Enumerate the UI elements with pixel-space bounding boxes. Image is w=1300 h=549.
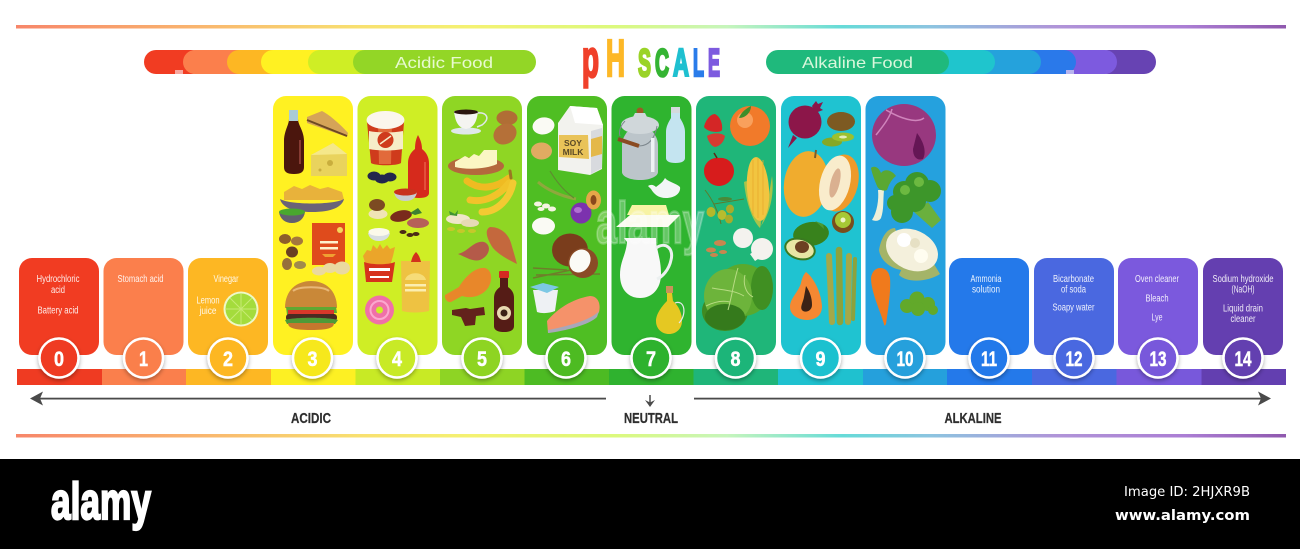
- icon: cauliflower: [879, 221, 945, 281]
- icon: milk can: [618, 108, 659, 180]
- card 11 text: Ammonia: [970, 274, 1002, 285]
- icon: butter on plate: [448, 150, 504, 175]
- card 12 text: of soda: [1061, 284, 1086, 296]
- icon: avocado half: [782, 234, 818, 264]
- title: pH SCALE: L: [693, 42, 704, 85]
- badge 8: 8: [730, 348, 741, 371]
- icon: cheese: [311, 143, 347, 176]
- card 14 text: Sodium hydroxide: [1212, 274, 1274, 285]
- icon: beetroot: [788, 101, 823, 148]
- foods: pH 10: [871, 104, 945, 326]
- footer url: www.alamy.com: [1115, 508, 1250, 524]
- card 13 text: Bleach: [1146, 294, 1168, 304]
- icon: guacamole bowl: [279, 208, 305, 223]
- foods: pH 3: [279, 110, 350, 330]
- card 13 text: Lye: [1152, 312, 1163, 324]
- card 11 text: solution: [972, 284, 1000, 296]
- top rainbow line: [16, 25, 1286, 28]
- icon: nuts: [279, 234, 306, 270]
- badge 6: 6: [561, 348, 571, 371]
- icon: soy milk carton: SOY: [564, 138, 582, 148]
- card 14 text: (NaOH): [1232, 284, 1254, 296]
- icon: donut: [365, 296, 394, 324]
- icon: green cabbage: [702, 264, 773, 331]
- header pill: alkaline food: [766, 50, 1156, 74]
- card 0 text: acid: [51, 285, 65, 296]
- footer band: [0, 459, 1300, 549]
- icon: lime slice: [224, 292, 258, 326]
- foods: pH 6: [530, 106, 603, 333]
- badge 2: 2: [223, 348, 233, 371]
- icon: red apple: [704, 153, 734, 186]
- badge 4: [378, 338, 416, 378]
- icon: potatoes: [490, 110, 520, 149]
- icon: coconut: [533, 234, 600, 278]
- badge 13: [1138, 338, 1178, 378]
- watermark: alamy: alamy: [596, 191, 704, 256]
- icon: white egg: [532, 218, 555, 234]
- icon: ketchup dip: [394, 188, 417, 201]
- pH colour cards: [19, 96, 1283, 355]
- text: E: [708, 42, 720, 85]
- icon: orange: [730, 106, 770, 146]
- icon: nachos bowl: [280, 185, 344, 212]
- icon: chips: [312, 262, 350, 276]
- icon: leek: [871, 167, 896, 221]
- icon: papaya: [790, 272, 822, 320]
- icon: prunes: [368, 172, 396, 184]
- icon: snack bag: [312, 223, 345, 265]
- icon: sweet potatoes: [458, 227, 517, 264]
- icon: milk pitcher: [620, 238, 672, 298]
- icon: coffee cup: [451, 110, 487, 134]
- footer image id: Image ID: 2HJXR9B: [1124, 484, 1250, 500]
- badge 1: [124, 338, 163, 378]
- icon: cola bottle: [284, 110, 304, 174]
- card 2 text: Lemon: [196, 296, 220, 306]
- badge 14: 14: [1234, 348, 1252, 371]
- icon: bananas: [467, 171, 513, 212]
- card 0 text: [36, 274, 80, 316]
- label: acidic: ACIDIC: [291, 411, 331, 427]
- icon: asparagus: [829, 250, 855, 322]
- pH strip: [17, 369, 1286, 385]
- badge 0: [40, 338, 78, 378]
- foods: pH 4: [363, 111, 430, 324]
- badge 9: 9: [816, 348, 826, 371]
- icon: avocado whole: [792, 220, 830, 248]
- card 14 text: [1212, 274, 1274, 325]
- arrow: alkaline: [694, 392, 1271, 406]
- badge 11: [970, 338, 1008, 378]
- icon: soy milk carton: [558, 106, 603, 175]
- icon: mushrooms: [733, 228, 773, 261]
- icon: popcorn bucket: [366, 111, 404, 165]
- icon: soy milk carton: MILK: [563, 147, 584, 157]
- label: alkaline: ALKALINE: [944, 411, 1002, 427]
- label: Acidic Food: Acidic Food: [395, 55, 493, 72]
- icon: butter dish: [616, 205, 680, 227]
- card 0 text: Hydrochloric: [36, 274, 80, 285]
- card 2 text: juice: [199, 306, 217, 317]
- badge 6: [546, 338, 586, 378]
- icon: cream bowl: [368, 228, 390, 241]
- icon: ketchup bottle: [408, 135, 429, 198]
- header pill: acidic food: [144, 50, 536, 74]
- icon: soy sauce bottle: [494, 271, 514, 332]
- card 13 text: [1135, 274, 1179, 324]
- icon: pistachios: [446, 210, 479, 233]
- card 13 text: Oven cleaner: [1135, 274, 1179, 285]
- badge 11: 11: [981, 348, 997, 371]
- icon: sandwich: [307, 111, 348, 137]
- card 12 text: Soapy water: [1052, 302, 1095, 314]
- icon: kiwi half: [832, 211, 854, 233]
- card 14 text: cleaner: [1230, 314, 1256, 325]
- icon: carrot: [871, 268, 890, 326]
- badge 10: [886, 338, 924, 378]
- footer logo: alamy: alamy: [51, 473, 151, 531]
- badge 10: 10: [896, 348, 914, 371]
- icon: salmon steak: [547, 296, 600, 333]
- badge 2: [208, 338, 248, 378]
- title: pH SCALE: p: [582, 30, 599, 88]
- icon: oil cruet: [656, 286, 684, 334]
- label: neutral: NEUTRAL: [624, 411, 678, 427]
- icon: brussels sprouts: [900, 292, 938, 316]
- bottom rainbow line: [16, 434, 1286, 438]
- card 11 text: [970, 274, 1002, 296]
- card 12 text: Bicarbonate: [1053, 274, 1094, 285]
- card 12 text: [1052, 274, 1095, 314]
- title: pH SCALE: S: [638, 42, 651, 85]
- icon: melon: [780, 148, 832, 220]
- title: pH SCALE: A: [673, 42, 689, 85]
- badge 12: [1054, 338, 1094, 378]
- icon: chicken leg: [445, 268, 491, 302]
- icon: plum half: [586, 190, 601, 210]
- badge 8: [716, 338, 755, 378]
- title: pH SCALE: H: [606, 30, 625, 88]
- badge 12: 12: [1066, 348, 1082, 371]
- badge 3: 3: [308, 348, 318, 371]
- badge 7: [632, 338, 670, 378]
- icon: plum: [570, 202, 592, 224]
- icon: mustard pouch: [401, 252, 430, 312]
- title: pH SCALE: C: [655, 42, 669, 85]
- badge 7: 7: [646, 348, 656, 371]
- badge 3: [293, 338, 332, 378]
- card 2 text: [196, 274, 239, 317]
- icon: kiwi whole: [827, 112, 855, 131]
- icon: pastry: [368, 199, 388, 219]
- icon: brown egg: [531, 142, 552, 160]
- card 0 text: Battery acid: [38, 306, 78, 316]
- badge 13: 13: [1150, 348, 1166, 371]
- icon: cream jug: [648, 178, 680, 198]
- icon: corn: [744, 156, 773, 228]
- card 2 text: Vinegar: [214, 274, 239, 285]
- foods: pH 5: [445, 110, 520, 332]
- icon: burger: [285, 281, 338, 330]
- icon: french fries: [363, 244, 395, 282]
- icon: olive branch: [705, 190, 744, 224]
- icon: broccoli: [887, 172, 941, 228]
- icon: melon half: [814, 151, 864, 215]
- title: pH SCALE: [582, 30, 720, 88]
- icon: red cabbage: [872, 104, 936, 166]
- badge 0: 0: [54, 348, 64, 371]
- icon: white beans: [534, 202, 556, 212]
- badge 5: [462, 338, 502, 378]
- icon: yogurt cup: [530, 283, 559, 313]
- icon: cocoa pods: [389, 208, 429, 237]
- icon: kiwi slices: [822, 132, 854, 146]
- badge 4: 4: [392, 348, 402, 371]
- arrow: acidic: [30, 392, 606, 406]
- icon: milk bottle: [666, 107, 685, 163]
- foods: pH 7: [616, 107, 685, 334]
- foods: pH 9: [780, 101, 864, 322]
- arrow: neutral: [645, 395, 655, 407]
- card 1 text: Stomach acid: [118, 274, 164, 285]
- icon: strawberry: [704, 114, 722, 132]
- icon: egg: [531, 116, 556, 136]
- label: Alkaline Food: Alkaline Food: [802, 55, 913, 72]
- icon: dark pieces: [452, 307, 485, 326]
- foods: pH 8: [702, 106, 773, 331]
- icon: bean pods: [538, 171, 576, 199]
- badge 1: 1: [139, 348, 148, 371]
- badge 9: [801, 338, 840, 378]
- number badges: [40, 338, 1262, 378]
- card 14 text: Liquid drain: [1223, 304, 1263, 314]
- icon: strawberry half: [707, 133, 725, 147]
- badge 5: 5: [477, 348, 487, 371]
- icon: almonds: [706, 240, 727, 257]
- badge 14: [1224, 338, 1262, 378]
